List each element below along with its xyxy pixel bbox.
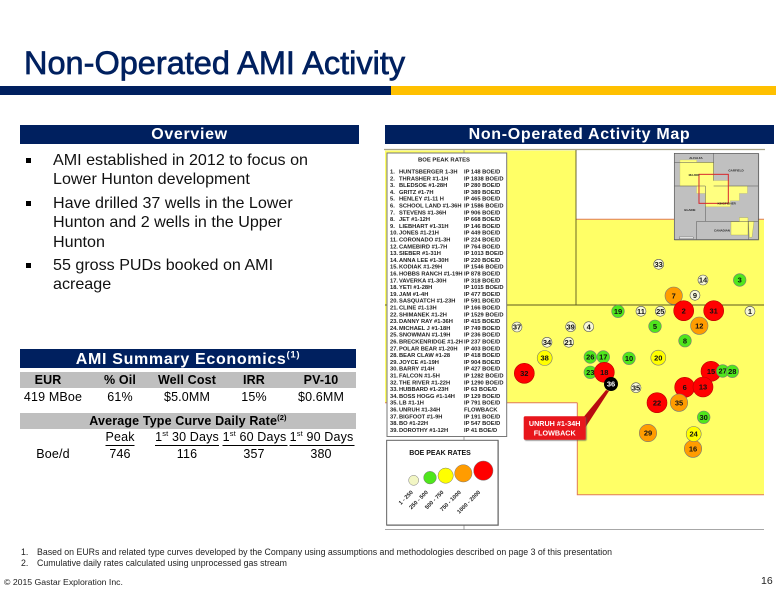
well list box: YETI #1-28H bbox=[399, 285, 432, 291]
well list box: HUNTSBERGER 1-3H bbox=[399, 170, 457, 176]
well list box: IP 1282 BOE/D bbox=[464, 374, 504, 380]
well list box: CORONADO #1-3H bbox=[399, 238, 450, 244]
callout: Unruh flowback: FLOWBACK bbox=[534, 428, 576, 438]
well list box: 10. bbox=[390, 231, 398, 237]
label well cost: Well Cost bbox=[158, 373, 216, 387]
copyright: © 2015 Gastar Exploration Inc. bbox=[4, 577, 123, 587]
well list box: IP 236 BOE/D bbox=[464, 333, 500, 339]
well list box: 18. bbox=[390, 285, 398, 291]
footnotes: 1. bbox=[21, 547, 28, 557]
footnotes: 2. bbox=[21, 558, 28, 568]
well list box: 37. bbox=[390, 414, 398, 420]
well list box: THE RIVER #1-22H bbox=[399, 380, 450, 386]
well bubbles: 6 bbox=[683, 383, 687, 392]
well list box: HENLEY #1-11 H bbox=[399, 197, 444, 203]
footnotes bbox=[21, 547, 612, 568]
bullet: wells drilled: Hunton bbox=[53, 233, 105, 251]
well list box: 25. bbox=[390, 333, 398, 339]
value well cost: $5.0MM bbox=[164, 390, 210, 404]
well bubbles bbox=[512, 259, 755, 457]
map base bbox=[384, 149, 765, 532]
bullet: AMI established: AMI established in 2012 to focus on bbox=[53, 150, 308, 168]
well list box: IP 41 BOE/D bbox=[464, 428, 497, 434]
legend box: 250 - 500 bbox=[409, 490, 430, 511]
bullet: PUDs bbox=[26, 256, 273, 293]
well list box: CLINE #1-13H bbox=[399, 306, 437, 312]
type curve header bbox=[20, 413, 356, 429]
well list box: 6. bbox=[390, 204, 395, 210]
well list box: MICHAEL J #1-18H bbox=[399, 326, 450, 332]
well list box: IP 280 BOE/D bbox=[464, 183, 500, 189]
well list box: 29. bbox=[390, 360, 398, 366]
well list box: HUBBARD #1-23H bbox=[399, 387, 449, 393]
heading: overview bbox=[20, 125, 359, 144]
well list box: IP 403 BOE/D bbox=[464, 346, 500, 352]
label PV-10: PV-10 bbox=[304, 373, 338, 387]
well list box: 7. bbox=[390, 210, 395, 216]
value EUR: 419 MBoe bbox=[24, 390, 82, 404]
well list box: IP 1546 BOE/D bbox=[464, 265, 504, 271]
well list box: 1. bbox=[390, 170, 395, 176]
well bubbles: 31 bbox=[710, 306, 718, 315]
callout: Unruh flowback: 36 bbox=[607, 380, 615, 389]
value oil: 61% bbox=[107, 390, 133, 404]
well list box: IP 591 BOE/D bbox=[464, 299, 500, 305]
well list box: UNRUH #1-34H bbox=[399, 408, 440, 414]
well bubbles: 35 bbox=[675, 398, 683, 407]
legend box bbox=[387, 440, 498, 525]
well list box: BLEDSOE #1-28H bbox=[399, 183, 447, 189]
well list box: DOROTHY #1-12H bbox=[399, 428, 448, 434]
legend box: 1000 - 2000 bbox=[456, 490, 482, 515]
well list box: 24. bbox=[390, 326, 398, 332]
well bubbles: 34 bbox=[543, 338, 552, 347]
well list box: 16. bbox=[390, 272, 398, 278]
well list box: 39. bbox=[390, 428, 398, 434]
well list box: 33. bbox=[390, 387, 398, 393]
callout: Unruh flowback: UNRUH #1-34H bbox=[529, 419, 580, 428]
well list box: SCHOOL LAND #1-36H bbox=[399, 204, 462, 210]
well list box bbox=[387, 153, 507, 436]
well bubbles: 25 bbox=[656, 307, 664, 316]
bullet: wells drilled: Have drilled 37 wells in the Lower bbox=[53, 194, 293, 212]
well list box: IP 237 BOE/D bbox=[464, 340, 500, 346]
row label: Boe/d bbox=[36, 447, 70, 461]
well bubbles: 13 bbox=[699, 383, 707, 392]
value 30 days: 116 bbox=[177, 447, 197, 461]
well list box: POLAR BEAR #1-20H bbox=[399, 346, 457, 352]
well bubbles: 15 bbox=[707, 367, 715, 376]
well bubbles: 35 bbox=[632, 383, 640, 392]
well bubbles: 37 bbox=[513, 323, 521, 332]
well list box: IP 906 BOE/D bbox=[464, 210, 500, 216]
well list box: 34. bbox=[390, 394, 398, 400]
well list box: IP 477 BOE/D bbox=[464, 292, 500, 298]
well list box: 20. bbox=[390, 299, 398, 305]
well list box: IP 220 BOE/D bbox=[464, 258, 500, 264]
well bubbles: 5 bbox=[653, 322, 657, 331]
well list box: 5. bbox=[390, 197, 395, 203]
well list box: STEVENS #1-36H bbox=[399, 210, 446, 216]
panel: summary economics bbox=[20, 349, 356, 461]
well list box: JAM #1-4H bbox=[399, 292, 428, 298]
well list box: 9. bbox=[390, 224, 395, 230]
well bubbles: 23 bbox=[586, 368, 594, 377]
inset locator map: GARFIELD bbox=[728, 168, 744, 172]
well bubbles: 27 bbox=[719, 367, 727, 376]
well list box: DANNY RAY #1-36H bbox=[399, 319, 453, 325]
column 60 days: 1st 60 Days bbox=[223, 429, 286, 444]
footnotes: Cumulative daily rates calculated using unprocessed gas stream bbox=[37, 558, 287, 568]
well list box: IP 465 BOE/D bbox=[464, 197, 500, 203]
inset locator map bbox=[674, 153, 758, 240]
well list box: VAVERKA #1-30H bbox=[399, 278, 447, 284]
well list box: IP 129 BOE/D bbox=[464, 394, 500, 400]
well list box: SHIMANEK #1-2H bbox=[399, 312, 447, 318]
well bubbles: 20 bbox=[654, 353, 662, 362]
well list box: JET #1-12H bbox=[399, 217, 430, 223]
inset locator map: CANADIAN bbox=[714, 229, 730, 233]
title: Non-Operated AMI Activity bbox=[24, 45, 405, 81]
well list box: 27. bbox=[390, 346, 398, 352]
label oil: % Oil bbox=[104, 373, 136, 387]
well list box: CAMEBIRD #1-7H bbox=[399, 244, 447, 250]
well list box: ANNA LEE #1-30H bbox=[399, 258, 449, 264]
well list box: IP 1015 BOE/D bbox=[464, 285, 504, 291]
bullet: AMI established bbox=[26, 150, 308, 188]
well list box: SNOWMAN #1-19H bbox=[399, 333, 450, 339]
bullet: wells drilled bbox=[26, 194, 293, 251]
well list box: IP 166 BOE/D bbox=[464, 306, 500, 312]
legend box: 750 - 1000 bbox=[439, 490, 463, 513]
well list box: BOE PEAK RATES bbox=[418, 158, 470, 164]
type curve header: Average Type Curve Daily Rate(2) bbox=[89, 413, 287, 428]
well list box: IP 1529 BOE/D bbox=[464, 312, 504, 318]
well bubbles: 29 bbox=[644, 429, 652, 438]
well list box: BEAR CLAW #1-28 bbox=[399, 353, 451, 359]
well list box: 2. bbox=[390, 176, 395, 182]
well list box: IP 318 BOE/D bbox=[464, 278, 500, 284]
inset locator map: ALFALFA bbox=[689, 156, 704, 160]
well list box: 26. bbox=[390, 340, 398, 346]
well list box: 8. bbox=[390, 217, 395, 223]
legend box: BOE PEAK RATES bbox=[409, 450, 471, 457]
well list box: BOSS HOGG #1-14H bbox=[399, 394, 455, 400]
well list box: 13. bbox=[390, 251, 398, 257]
economics header row bbox=[20, 372, 356, 388]
well list box: IP 1013 BOE/D bbox=[464, 251, 504, 257]
well list box: BRECKENRIDGE #1-2H bbox=[399, 340, 463, 346]
well bubbles: 19 bbox=[614, 307, 622, 316]
well bubbles: 7 bbox=[672, 291, 676, 300]
legend box: 500 - 750 bbox=[424, 490, 445, 511]
well list box: 4. bbox=[390, 190, 395, 196]
well bubbles: 10 bbox=[625, 354, 633, 363]
well list box: IP 1838 BOE/D bbox=[464, 176, 504, 182]
well list box: 38. bbox=[390, 421, 398, 427]
well bubbles: 28 bbox=[728, 367, 736, 376]
well bubbles: 21 bbox=[565, 338, 573, 347]
well list box: 36. bbox=[390, 408, 398, 414]
panel: overview bbox=[20, 125, 359, 293]
well list box: BARRY #14H bbox=[399, 367, 434, 373]
inset locator map: MAJOR bbox=[689, 173, 700, 177]
well list box: 35. bbox=[390, 401, 398, 407]
well bubbles: 33 bbox=[655, 260, 663, 269]
value 60 days: 357 bbox=[243, 447, 265, 461]
well list box: IP 191 BOE/D bbox=[464, 414, 500, 420]
well list box: 12. bbox=[390, 244, 398, 250]
heading: overview: Overview bbox=[151, 126, 228, 143]
well bubbles: 1 bbox=[748, 307, 752, 316]
heading: map: Non-Operated Activity Map bbox=[469, 126, 690, 143]
well bubbles: 16 bbox=[689, 444, 697, 453]
well list box: 11. bbox=[390, 238, 398, 244]
well list box: IP 63 BOE/D bbox=[464, 387, 497, 393]
column peak: Peak bbox=[106, 430, 135, 444]
title rule bar bbox=[0, 86, 776, 95]
well list box: IP 1290 BOE/D bbox=[464, 380, 504, 386]
well list box: 22. bbox=[390, 312, 398, 318]
well list box: 15. bbox=[390, 265, 398, 271]
value 90 days: 380 bbox=[310, 447, 332, 461]
well list box: SASQUATCH #1-23H bbox=[399, 299, 455, 305]
well list box: FLOWBACK bbox=[464, 408, 498, 414]
bullet: PUDs: acreage bbox=[53, 275, 111, 293]
well list box: 21. bbox=[390, 306, 398, 312]
inset locator map: BLAINE bbox=[684, 208, 696, 212]
well list box: IP 1586 BOE/D bbox=[464, 204, 504, 210]
well bubbles: 18 bbox=[600, 368, 608, 377]
heading: summary economics: AMI Summary Economics(1) bbox=[76, 350, 300, 368]
page number: 16 bbox=[761, 575, 773, 587]
well list box: IP 791 BOE/D bbox=[464, 401, 500, 407]
well list box: IP 224 BOE/D bbox=[464, 238, 500, 244]
well list box: BIGFOOT #1-9H bbox=[399, 414, 442, 420]
value PV-10: $0.6MM bbox=[298, 390, 344, 404]
value IRR: 15% bbox=[241, 390, 267, 404]
well list box: SIEBER #1-31H bbox=[399, 251, 441, 257]
well list box: THRASHER #1-1H bbox=[399, 176, 448, 182]
well list box: 32. bbox=[390, 380, 398, 386]
well bubbles: 38 bbox=[541, 354, 549, 363]
well list box: JOYCE #1-19H bbox=[399, 360, 439, 366]
well list box: IP 146 BOE/D bbox=[464, 224, 500, 230]
well list box: 3. bbox=[390, 183, 395, 189]
well bubbles: 24 bbox=[690, 430, 699, 439]
well list box: 28. bbox=[390, 353, 398, 359]
inset locator map: KINGFISHER bbox=[717, 202, 737, 206]
well list box: 30. bbox=[390, 367, 398, 373]
bullet: AMI established: Lower Hunton development bbox=[53, 170, 250, 188]
well bubbles: 22 bbox=[653, 398, 661, 407]
well list box: IP 668 BOE/D bbox=[464, 217, 500, 223]
well bubbles: 39 bbox=[567, 322, 575, 331]
well list box: IP 389 BOE/D bbox=[464, 190, 500, 196]
well list box: IP 418 BOE/D bbox=[464, 353, 500, 359]
well bubbles: 9 bbox=[693, 291, 697, 300]
well bubbles: 8 bbox=[683, 336, 687, 345]
well bubbles: 30 bbox=[700, 413, 708, 422]
well list box: 23. bbox=[390, 319, 398, 325]
well list box: 19. bbox=[390, 292, 398, 298]
callout: Unruh flowback bbox=[524, 377, 618, 440]
bullet: PUDs: 55 gross PUDs booked on AMI bbox=[53, 256, 273, 274]
label EUR: EUR bbox=[35, 373, 61, 387]
well list box: JONES #1-21H bbox=[399, 231, 439, 237]
well list box: BO #1-22H bbox=[399, 421, 428, 427]
column 30 days: 1st 30 Days bbox=[155, 429, 219, 444]
well bubbles: 12 bbox=[695, 321, 703, 330]
legend box: 1 - 250 bbox=[398, 490, 415, 507]
well bubbles: 2 bbox=[682, 306, 686, 315]
well bubbles: 4 bbox=[587, 322, 592, 331]
well list box: HOBBS RANCH #1-19H bbox=[399, 272, 463, 278]
well bubbles: 17 bbox=[599, 353, 607, 362]
well list box: 31. bbox=[390, 374, 398, 380]
well list box: 17. bbox=[390, 278, 398, 284]
well bubbles: 11 bbox=[637, 307, 645, 316]
well list box: 14. bbox=[390, 258, 398, 264]
well list box: IP 878 BOE/D bbox=[464, 272, 500, 278]
well list box: IP 764 BOE/D bbox=[464, 244, 500, 250]
well list box: IP 427 BOE/D bbox=[464, 367, 500, 373]
well list box: IP 148 BOE/D bbox=[464, 170, 500, 176]
well list box: IP 904 BOE/D bbox=[464, 360, 500, 366]
footnotes: Based on EURs and related type curves developed by the Company using assumptions and methodologies described on page 3 of this presentation bbox=[37, 547, 612, 557]
bullet: wells drilled: Hunton and 2 wells in the Upper bbox=[53, 213, 282, 231]
value peak: 746 bbox=[109, 447, 131, 461]
well list box: IP 415 BOE/D bbox=[464, 319, 500, 325]
well list box: IP 449 BOE/D bbox=[464, 231, 500, 237]
well bubbles: 26 bbox=[586, 353, 594, 362]
well bubbles: 32 bbox=[520, 369, 528, 378]
well bubbles: 3 bbox=[738, 276, 742, 285]
heading: map bbox=[385, 125, 774, 144]
well list box: IP 749 BOE/D bbox=[464, 326, 500, 332]
label IRR: IRR bbox=[243, 373, 265, 387]
heading: summary economics bbox=[20, 349, 356, 368]
well list box: LB #1-1H bbox=[399, 401, 424, 407]
well list box: KODIAK #1-29H bbox=[399, 265, 442, 271]
well list box: IP 547 BOE/D bbox=[464, 421, 500, 427]
well list box: FALCON #1-5H bbox=[399, 374, 440, 380]
well bubbles: 14 bbox=[699, 276, 708, 285]
well list box: GRITZ #1-7H bbox=[399, 190, 434, 196]
well list box: LIEBHART #1-31H bbox=[399, 224, 449, 230]
column 90 days: 1st 90 Days bbox=[290, 429, 353, 444]
